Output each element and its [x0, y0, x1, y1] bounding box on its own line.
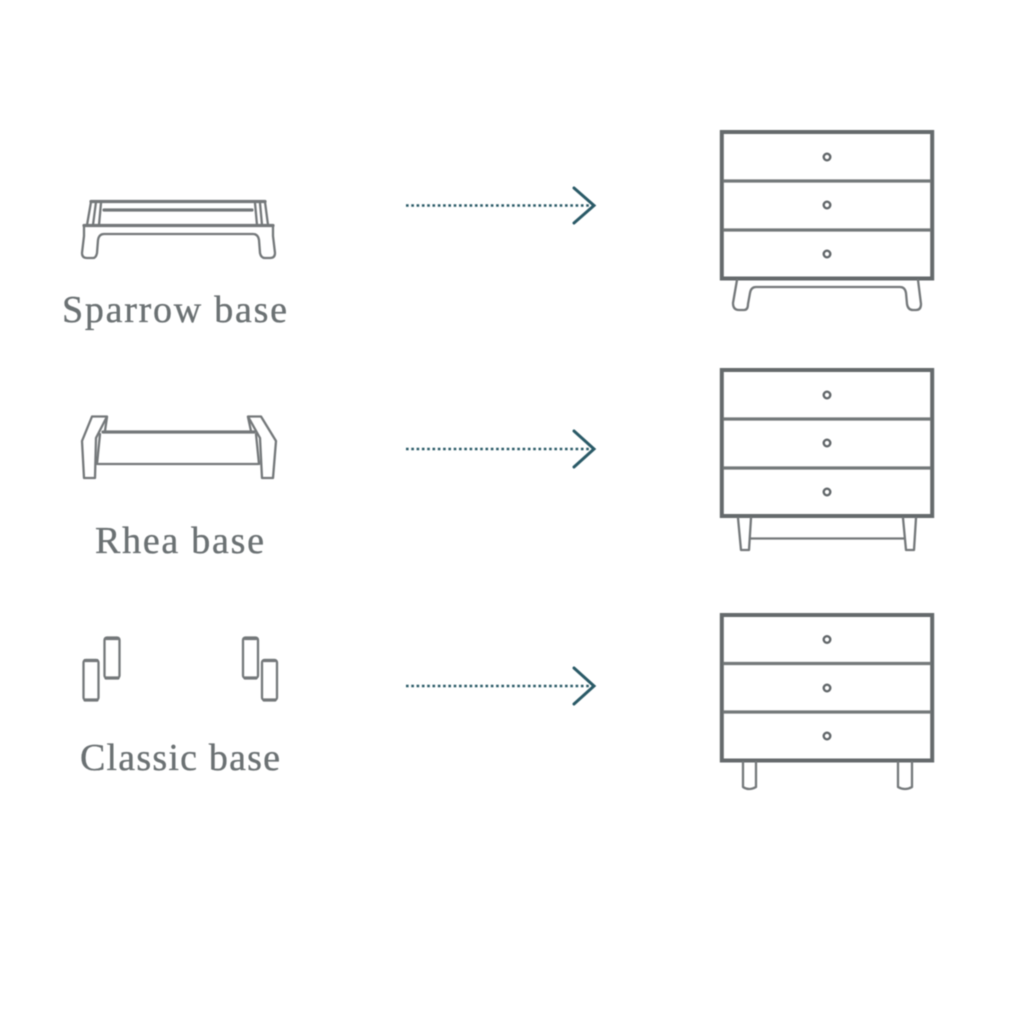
- row: Classic base: [80, 638, 280, 779]
- icon: Rhea base frame: [82, 416, 276, 478]
- arrow: Sparrow base to dresser: [406, 188, 594, 223]
- row: Rhea base: [82, 416, 276, 562]
- Sparrow legs: [733, 280, 921, 310]
- dresser body: [722, 615, 932, 760]
- dresser with Sparrow base: [722, 132, 932, 310]
- arrow: Classic base to dresser: [406, 668, 594, 704]
- dresser body: [722, 132, 932, 278]
- arrow: Rhea base to dresser: [406, 431, 594, 467]
- Classic legs: [743, 762, 912, 789]
- dresser body: [722, 370, 932, 516]
- dresser with Rhea base: [722, 370, 932, 550]
- label: Rhea base: Rhea base: [95, 520, 264, 562]
- label: Sparrow base: Sparrow base: [62, 289, 287, 331]
- label: Classic base: Classic base: [80, 737, 280, 779]
- icon: Classic base legs: [84, 638, 277, 700]
- dresser with Classic base: [722, 615, 932, 789]
- row: Sparrow base: [62, 202, 287, 331]
- icon: Sparrow base frame: [82, 202, 275, 258]
- Rhea legs: [738, 518, 916, 550]
